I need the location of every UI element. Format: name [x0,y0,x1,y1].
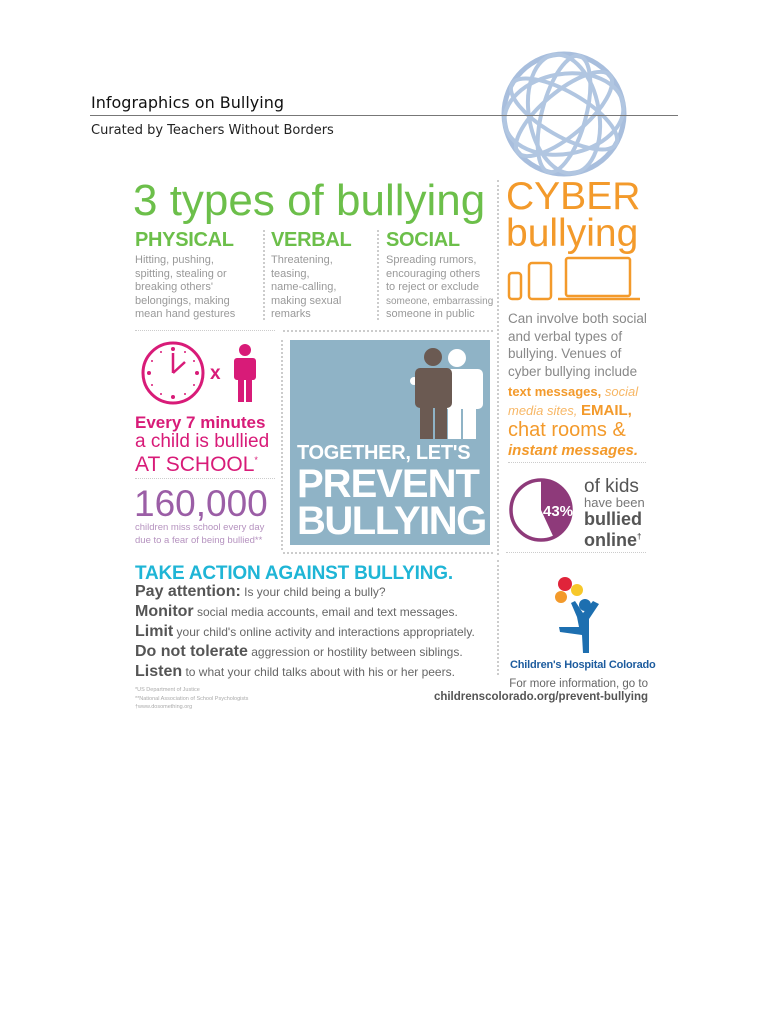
panel: verbal: remarks [271,308,311,320]
list: actions: Listen to what your child talks about with his or her peers. [135,663,455,680]
panel: verbal: teasing, [271,268,310,280]
panel: social: someone in public [386,308,475,320]
text: cyber description: cyber bullying include [508,364,637,378]
icon: clock [142,342,204,404]
text: due to a fear of being bullied** [135,535,262,546]
text: every 7 minutes: a child is bullied [135,431,269,452]
panel: social: Spreading rumors, [386,254,476,266]
panel: verbal: making sexual [271,294,341,306]
panel: social: encouraging others [386,268,480,280]
footnotes: **National Association of School Psychologists [135,696,248,702]
text: every 7 minutes: AT SCHOOL* [135,453,258,476]
text: childrenscolorado.org/prevent-bullying [434,691,648,703]
text: children miss school every day [135,522,264,533]
heading: cyber bullying [506,175,640,255]
text: together let's prevent bullying: TOGETHER, LET'S [297,442,470,464]
text: of kids bullied online: online† [584,530,641,550]
text: together let's prevent bullying [297,442,486,543]
list: actions: Monitor social media accounts, email and text messages. [135,603,458,620]
icon: two people [410,348,483,439]
list: actions [135,583,475,680]
panel: prevent bullying [290,340,490,545]
panel: verbal: Threatening, [271,254,333,266]
icon: devices [508,256,640,300]
panel: physical: belongings, making [135,294,230,306]
text: every 7 minutes [135,413,269,476]
text: cyber description: Can involve both social [508,311,647,326]
panel: physical: PHYSICAL [135,229,234,251]
page title: Infographics on Bullying [91,93,284,112]
panel: social [386,229,493,320]
text: cyber venues: text messages, social [508,384,638,399]
heading: 3 types of bullying: 3 types of bullying [133,176,485,225]
panel: physical: mean hand gestures [135,308,235,320]
footnotes [135,687,248,710]
text: of kids bullied online: of kids [584,476,639,497]
text: cyber description: bullying. Venues of [508,346,621,361]
text: of kids bullied online [584,476,645,550]
text: cyber venues [508,384,638,459]
list: actions: Limit your child's online activity and interactions appropriately. [135,623,475,640]
text: of kids bullied online: bullied [584,509,642,529]
footnotes: †www.dosomething.org [135,704,192,710]
text: 160,000: 160,000 [134,483,268,524]
text: cyber venues: instant messages. [508,442,638,459]
panel: social: to reject or exclude [386,281,479,293]
chart: 43% pie: 43% [543,503,573,520]
logo: globe [502,52,626,176]
text: together let's prevent bullying: PREVENT [297,462,479,506]
subtitle: Curated by Teachers Without Borders [91,123,334,138]
text: every 7 minutes: Every 7 minutes [135,413,265,432]
list: actions: Pay attention: Is your child being a bully? [135,583,386,600]
text: cyber venues: media sites, EMAIL, [508,402,632,419]
panel: verbal: VERBAL [271,229,351,251]
text: more info: For more information, go to [509,678,648,690]
panel: physical: breaking others' [135,281,213,293]
logo: children's hospital [555,577,599,653]
text: together let's prevent bullying: BULLYING [297,499,486,543]
text: cyber description [508,311,647,379]
panel: physical: Hitting, pushing, [135,254,214,266]
footnotes: *US Department of Justice [135,687,200,693]
panel: physical: spitting, stealing or [135,268,227,280]
text: of kids bullied online: have been [584,495,645,510]
icon: x person: x [210,363,221,384]
text: Children's Hospital Colorado [510,659,656,671]
panel: verbal [271,229,352,320]
panel: verbal: name-calling, [271,281,336,293]
panel: physical [135,229,235,320]
chart: 43% pie [509,478,573,542]
heading: cyber bullying: CYBER [506,175,640,218]
panel: social: someone, embarrassing [386,296,493,306]
heading: cyber bullying: bullying [506,212,638,255]
panel: social: SOCIAL [386,229,460,251]
list: actions: Do not tolerate aggression or hostility between siblings. [135,643,463,660]
text: cyber venues: chat rooms & [508,419,626,441]
heading: take action: TAKE ACTION AGAINST BULLYING. [135,563,453,584]
text: cyber description: and verbal types of [508,328,622,344]
